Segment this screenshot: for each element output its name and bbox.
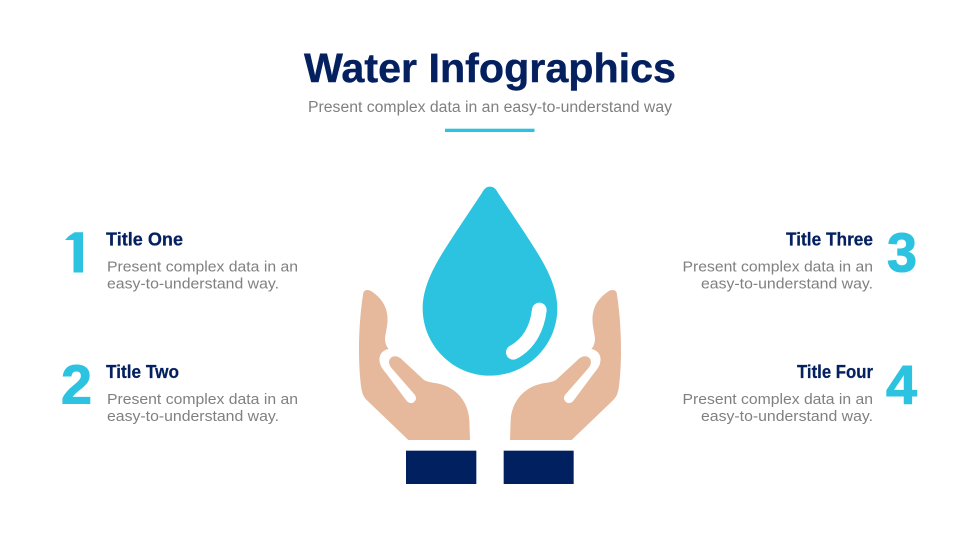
- item 2 description: easy-to-understand way.: [107, 408, 279, 425]
- item 3 description: easy-to-understand way.: [701, 276, 873, 292]
- item 1: [65, 232, 297, 292]
- title: Water Infographics: [304, 45, 676, 91]
- title underline: [445, 129, 534, 132]
- item 3 description: Present complex data in an: [682, 258, 873, 276]
- item 4 description: easy-to-understand way.: [701, 408, 873, 425]
- header: [304, 45, 676, 132]
- item 4 heading: Title Four: [797, 362, 873, 382]
- item 1 description: easy-to-understand way.: [107, 276, 279, 292]
- item 2: [61, 354, 298, 425]
- item 4 description: Present complex data in an: [682, 391, 873, 408]
- number 4: 4: [886, 354, 917, 416]
- icon: left sleeve: [406, 451, 476, 484]
- number 1: 1: [62, 222, 93, 284]
- item 1 description: Present complex data in an: [107, 258, 298, 276]
- item 3 heading: Title Three: [786, 230, 873, 250]
- item 3: [682, 222, 917, 292]
- icon: right sleeve: [504, 451, 574, 484]
- item 4: [682, 354, 917, 425]
- item 2 heading: Title Two: [106, 362, 179, 382]
- item 2 description: Present complex data in an: [107, 391, 298, 408]
- subtitle: Present complex data in an easy-to-understand way: [308, 99, 672, 116]
- item 1 heading: Title One: [106, 230, 183, 250]
- icon: water drop: [423, 187, 557, 376]
- number 2: 2: [61, 354, 92, 416]
- icon: right hand: [510, 290, 621, 440]
- number 3: 3: [887, 222, 917, 284]
- central illustration: hands holding water drop: [359, 187, 621, 484]
- icon: left hand: [359, 290, 470, 440]
